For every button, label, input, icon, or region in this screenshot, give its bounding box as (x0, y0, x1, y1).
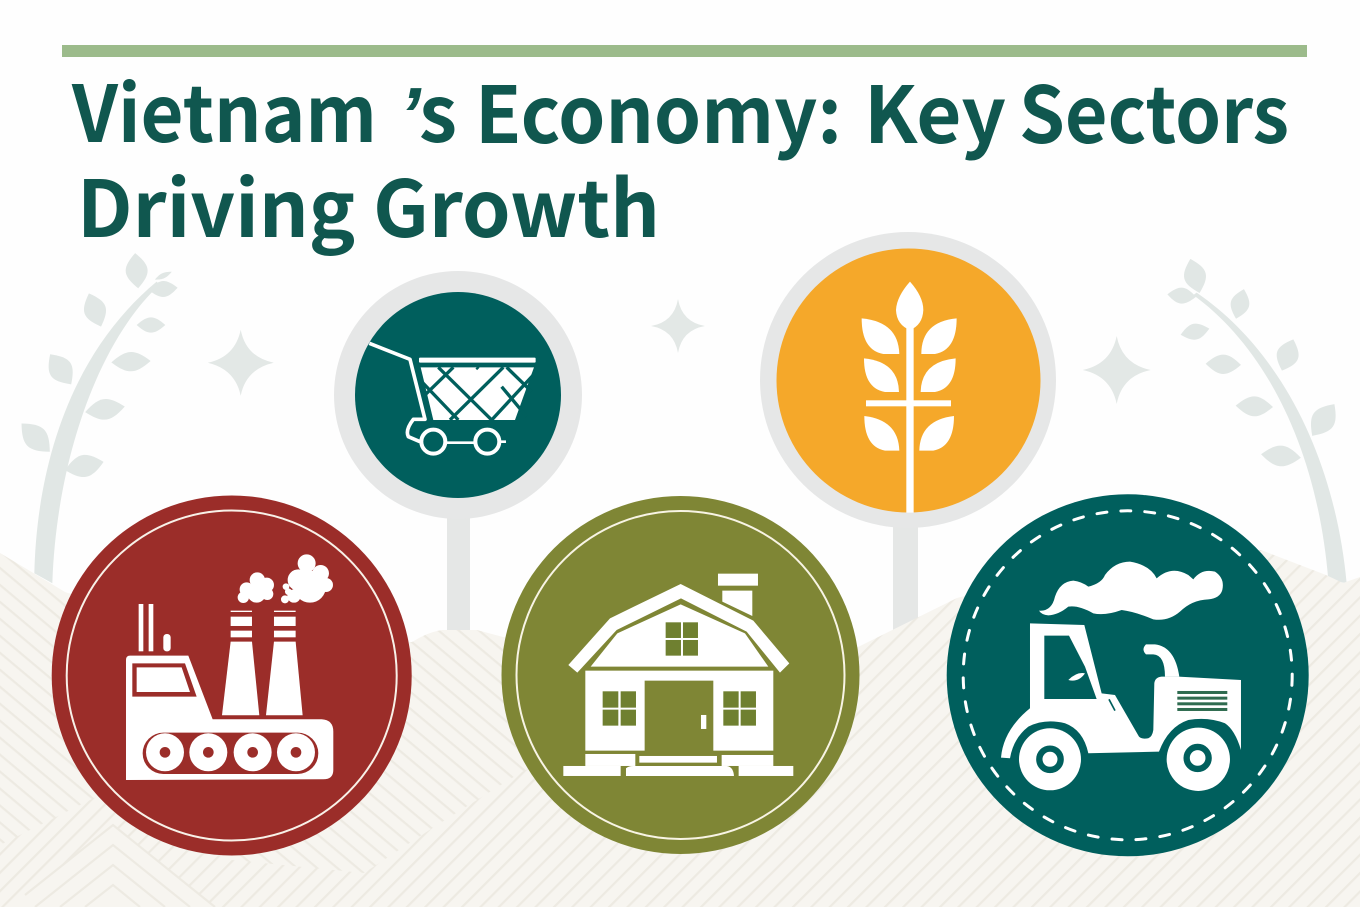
patterned hills background (0, 550, 1360, 907)
icon: factory with tracks and smokestacks (126, 554, 333, 780)
right vine decoration (1167, 256, 1347, 583)
top accent bar (62, 45, 1307, 57)
sparkle stars (208, 299, 1151, 404)
title: Economy: (475, 54, 842, 166)
disc: real estate house (502, 496, 860, 854)
disc: industry factory (52, 496, 412, 856)
disc: agriculture wheat (760, 232, 1056, 528)
title: s (419, 53, 457, 165)
title: Key (864, 54, 1006, 166)
icon: wheat stalk (862, 282, 957, 513)
left vine decoration (13, 252, 178, 583)
title: Sectors (1019, 54, 1289, 166)
title: Vietnam (71, 53, 377, 165)
disc: retail shopping cart (334, 271, 582, 519)
title: ’ (399, 71, 422, 159)
icon: house (563, 574, 793, 776)
icon: tractor with smoke (1001, 562, 1241, 791)
icon: shopping cart (369, 343, 536, 454)
disc: transport tractor (947, 494, 1309, 856)
signpost stems (447, 510, 918, 635)
title: Driving Growth (77, 148, 660, 260)
title (71, 53, 1289, 260)
